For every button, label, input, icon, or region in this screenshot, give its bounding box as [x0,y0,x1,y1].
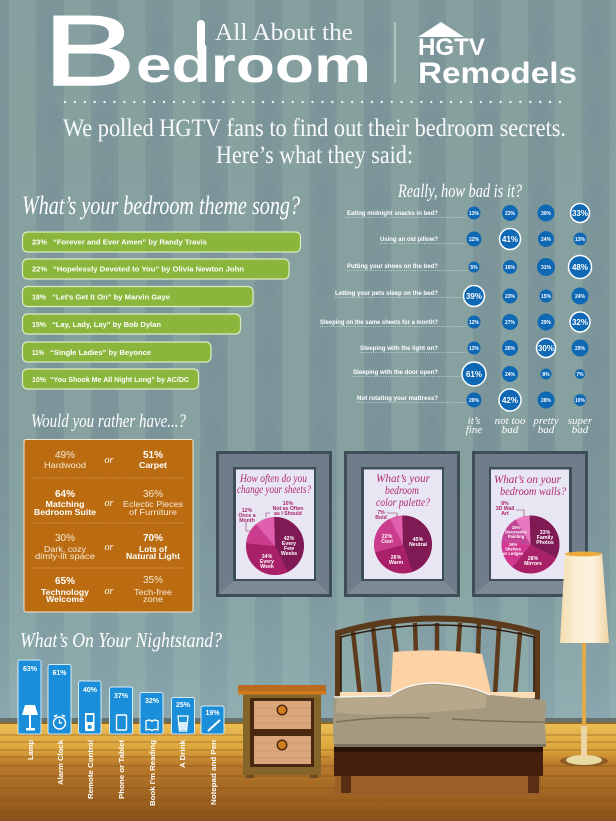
question labels [320,210,468,402]
pie chart: walls: Painting [508,534,525,539]
pie chart: walls: 33% [540,530,551,536]
icon: drink [178,716,188,731]
pie chart: walls: 8% [501,501,509,507]
pie chart: sheets: Month [239,518,255,524]
pie chart: color palette: Bold [375,515,387,521]
bubble chart: how bad: 13% [469,346,480,352]
heading: how bad: Really, how bad is it? [397,181,522,202]
bubble chart: how bad: 28% [541,398,552,404]
panel: would you rather: Dark, cozy [44,545,86,554]
pie chart: walls: Shelves [505,546,522,552]
pie chart: color palette: 22% [382,534,393,540]
pie chart: sheets: Once a [238,513,256,519]
bed [333,618,546,795]
panel: would you rather: zone [143,595,164,604]
bubble chart: how bad: 26% [505,346,516,352]
frame: walls [472,451,588,597]
nightstand furniture [238,685,326,778]
pie chart: walls: 16% [509,542,517,547]
floor lamp [560,552,609,766]
bar chart: theme songs [22,232,300,389]
panel: would you rather: 51% [143,450,163,461]
bubble chart: how bad: 41% [502,235,518,244]
frame title [237,471,311,496]
panel: would you rather: Eclectic Pieces [123,500,183,509]
bubble chart: how bad: 20% [469,398,480,404]
bubble chart: how bad: 24% [575,294,586,300]
pie chart: sheets: Not as Often [273,506,303,512]
nightstand labels: Lamp [26,740,35,760]
panel: would you rather: or [105,498,114,509]
intro text: Here’s what they said: [216,142,413,169]
panel: would you rather: 35% [143,575,163,586]
icon: open book [146,720,158,730]
bubble chart: how bad: 30% [541,211,552,217]
bubble chart: how bad: 22% [469,237,480,243]
icon: lamp [22,705,38,730]
question labels: Putting your shoes on the bed? [347,263,438,270]
scale labels: bad [572,424,589,436]
pie chart: sheets: as I Should [274,511,302,517]
bar chart: theme songs: “You Shook Me All Night Long” by AC/DC [50,375,190,384]
bubble chart: how bad: 16% [505,265,516,271]
question labels: Using an old pillow? [380,236,438,243]
pie chart: walls: Mirrors [524,561,542,567]
bubble chart: how bad [462,204,592,411]
bubble chart: how bad: 24% [505,372,516,378]
intro text: We polled HGTV fans to find out their bedroom secrets. [63,115,566,142]
bar chart: theme songs: 18% [32,292,46,302]
headboard [338,618,537,700]
panel: would you rather: Technology [41,588,90,597]
bubble chart: how bad: 7% [576,372,584,378]
pie chart: color palette: Neutral [409,542,427,548]
bubble chart: how bad: 30% [538,344,554,353]
question labels: Sleeping with the light on? [360,345,438,352]
panel: would you rather: 49% [55,450,75,461]
bubble chart: how bad: 32% [572,318,588,327]
bar chart: theme songs: 22% [32,264,47,274]
bubble chart: how bad: 23% [505,294,516,300]
dotted rule [65,101,566,103]
bubble chart: how bad: 15% [541,294,552,300]
scale labels: fine [466,424,482,436]
pie chart: color palette: 45% [413,537,424,543]
nightstand labels: Notepad and Pen [209,740,218,805]
bar chart: nightstand: 19% [205,710,220,717]
nightstand labels: A Drink [178,739,187,768]
bar chart: nightstand: 63% [23,666,38,673]
frame title: color palette? [376,495,430,509]
bar chart: theme songs: “Let’s Get It On” by Marvin Gaye [52,292,170,302]
pie chart: walls [496,501,560,574]
pie chart: sheets: 34% [262,554,273,560]
pie chart: walls: or Ledges [503,551,524,556]
wood floor [0,718,616,821]
pie chart: sheets: 12% [242,508,253,514]
bar chart: nightstand [18,660,224,734]
panel: would you rather: 65% [55,576,75,587]
question labels: Not rotating your mattress? [357,395,438,402]
nightstand labels: Alarm Clock [56,739,65,785]
frame title: What’s on your [494,472,561,486]
frame: sheets [216,451,332,597]
bubble chart: how bad: 48% [572,263,588,272]
title: All About the Bedroom: All About the [215,20,353,46]
nightstand labels [26,739,218,806]
logo: HGTV Remodels: Remodels [418,57,577,90]
icon: pen [208,720,220,731]
panel: would you rather [24,440,193,612]
pie chart: sheets [238,501,304,575]
pie chart: walls: Photos [536,540,554,546]
bubble chart: how bad: 31% [541,265,552,271]
pie chart: sheets: 10% [283,501,294,507]
panel: would you rather: Tech-free [134,588,173,597]
frame title: bedroom [385,483,419,497]
bar chart: theme songs: 23% [32,238,47,246]
panel: would you rather: Hardwood [44,461,86,470]
question labels: Sleeping on the same sheets for a month? [320,319,438,326]
bubble chart: how bad: 8% [542,372,550,378]
panel: would you rather: Lots of [139,545,167,554]
bubble chart: how bad: 13% [469,211,480,217]
bar chart: nightstand: 40% [83,687,98,694]
frame: color palette [344,451,460,597]
panel: would you rather: or [105,586,114,597]
frame title [376,471,430,509]
pie chart: color palette: Cool [381,539,393,545]
bubble chart: how bad: 10% [575,398,586,404]
pie chart: walls: Family [537,535,553,541]
bar chart: nightstand: 37% [114,693,129,700]
panel: would you rather: or [105,542,114,553]
scale labels: super [568,415,593,427]
title: All About the Bedroom: edroom [136,37,371,93]
scale labels: bad [502,424,519,436]
nightstand labels: Remote Control [86,740,95,799]
bar chart: theme songs: “Single Ladies” by Beyonce [50,348,151,357]
bar chart: theme songs: 11% [32,348,44,357]
panel: would you rather: Bedroom Suite [34,508,97,517]
question labels: Sleeping with the door open? [353,369,438,376]
title: All About the Bedroom [43,0,371,107]
pie chart: sheets: Every [260,559,274,565]
bubble chart: how bad: 33% [572,209,588,218]
pie chart: walls: 3D Wall [496,506,515,512]
panel: would you rather: Natural Light [126,552,180,561]
bubble chart: how bad: 23% [505,211,516,217]
bubble chart: how bad: 42% [502,396,518,405]
nightstand labels: Phone or Tablet [117,739,126,799]
pie chart: color palette: 26% [391,555,402,561]
bubble chart: how bad: 5% [470,265,478,271]
panel: would you rather: Welcome [46,595,85,604]
panel: would you rather: 70% [143,533,163,544]
pie chart: sheets: Few [284,546,295,552]
nightstand labels: Book I’m Reading [148,740,157,806]
heading: theme song: What’s your bedroom theme song? [22,191,300,220]
pie chart: sheets: 42% [284,536,295,542]
panel: would you rather: 30% [55,533,75,544]
bar chart: theme songs: 10% [32,375,46,384]
frame title: bedroom walls? [500,484,566,498]
logo: HGTV Remodels: HGTV [418,34,485,61]
icon: tablet [116,715,126,730]
bubble chart: how bad: 39% [466,292,482,301]
bed base [334,747,543,776]
bar chart: nightstand: 61% [52,670,67,677]
pie chart: color palette: Warm [389,560,403,566]
pie chart: walls: 15% [512,525,520,530]
frame title: change your sheets? [237,482,311,496]
frame title: How often do you [239,471,307,485]
icon: remote control [85,713,94,731]
intro text [63,115,566,169]
heading: nightstand: What’s On Your Nightstand? [20,628,222,652]
heading: would you rather: Would you rather have...? [31,411,186,432]
panel: would you rather: dimly-lit space [35,552,96,561]
pie chart: sheets: Weeks [281,551,297,557]
frame title [494,472,566,498]
bar chart: theme songs: 15% [32,320,46,329]
bubble chart: how bad: 13% [575,237,586,243]
pie chart: sheets: Every [282,541,296,547]
scale labels: not too [495,415,526,427]
panel: would you rather: of Furniture [129,508,178,517]
pie chart: walls: Decorative [505,530,527,534]
icon: alarm clock [54,715,66,729]
pie chart: walls: 28% [528,556,539,562]
panel: would you rather: Carpet [139,461,167,470]
pie chart: sheets: Week [260,564,274,570]
divider [394,22,396,83]
pillow [390,650,492,700]
bubble chart: how bad: 24% [541,237,552,243]
bar chart: theme songs: “Forever and Ever Amen” by Randy Travis [53,238,207,246]
pie chart: walls: Art [501,511,509,517]
panel: would you rather: 64% [55,489,75,500]
panel: would you rather: or [105,455,114,466]
scale labels: pretty [532,415,559,427]
blanket [333,683,546,747]
question labels: Letting your pets sleep on the bed? [335,290,438,297]
bubble chart: how bad: 29% [541,320,552,326]
pie chart: color palette [374,510,432,574]
scale labels: bad [538,424,555,436]
scale labels [466,415,593,436]
mattress sheet [340,692,535,698]
scale labels: it’s [468,415,480,427]
bubble chart: how bad: 29% [575,346,586,352]
bubble chart: how bad: 27% [505,320,516,326]
panel: would you rather: 36% [143,489,163,500]
panel: would you rather: Matching [46,500,85,509]
pie chart: color palette: 7% [377,510,385,516]
bubble chart: how bad: 12% [469,320,480,326]
question labels: Eating midnight snacks in bed? [347,210,438,217]
bar chart: nightstand: 32% [145,698,160,705]
bar chart: nightstand: 25% [176,702,191,709]
logo: HGTV Remodels [418,22,577,90]
bubble chart: how bad: 61% [466,370,482,379]
bar chart: theme songs: “Hopelessly Devoted to You” by Olivia Newton John [53,264,244,274]
bar chart: theme songs: “Lay, Lady, Lay” by Bob Dylan [52,320,161,329]
frame title: What’s your [376,471,430,485]
